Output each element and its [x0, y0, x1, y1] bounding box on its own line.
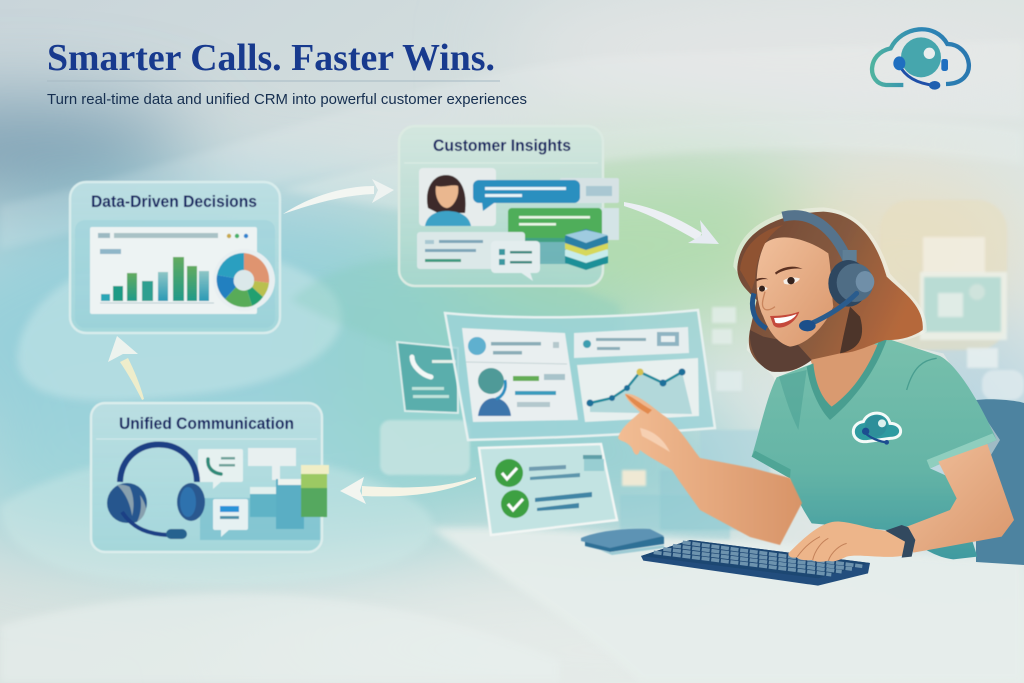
typing hand — [788, 522, 907, 562]
shirt — [752, 338, 997, 559]
chair — [976, 399, 1024, 565]
panel: customer insights — [399, 126, 619, 286]
customer photo card — [419, 168, 496, 226]
arrow: tasks to unified — [340, 477, 476, 504]
desk surface — [430, 528, 1024, 683]
headset — [752, 215, 874, 331]
subtitle: Turn real-time data and unified CRM into powerful customer experiences — [47, 91, 527, 108]
hair — [737, 212, 923, 372]
right arm — [905, 444, 1014, 553]
icon: headset — [107, 444, 205, 539]
donut chart — [213, 249, 275, 311]
title: Smarter Calls. Faster Wins. — [47, 37, 495, 79]
wristwatch — [885, 525, 915, 558]
arrow: unified to decisions — [108, 336, 144, 400]
contact card — [574, 327, 689, 358]
customer record card — [417, 232, 525, 269]
shirt logo — [853, 413, 901, 445]
panel: phone card — [397, 342, 458, 413]
keyboard — [641, 540, 870, 586]
panel: task checklist — [479, 444, 617, 535]
heading: data-driven decisions: Data-Driven Decisions — [91, 193, 257, 211]
pixel blocks — [200, 448, 329, 540]
check item two — [501, 490, 592, 518]
list bubble — [491, 241, 540, 281]
dashboard window — [90, 227, 275, 314]
panel: data-driven decisions — [70, 182, 280, 333]
panel: unified communication — [91, 403, 329, 552]
logo — [872, 29, 969, 90]
phone on desk — [581, 529, 664, 555]
arrow: insights to agent — [624, 202, 719, 244]
line chart card — [577, 358, 699, 422]
database stack — [565, 229, 608, 270]
heading: unified communication: Unified Communication — [119, 415, 294, 433]
halo outline — [733, 207, 1000, 457]
neck — [800, 303, 880, 410]
customer message bubbles — [473, 178, 619, 264]
agent figure — [641, 207, 1014, 586]
panel: agent dashboard — [445, 310, 715, 440]
heading: customer insights: Customer Insights — [433, 137, 571, 155]
pointing arm and hand — [618, 394, 802, 545]
arrow: decisions to insights — [283, 179, 394, 214]
chat bubble: phone — [198, 449, 243, 489]
bar chart — [100, 257, 214, 303]
chat bubble: message — [213, 499, 248, 537]
face — [756, 237, 833, 347]
agent profile card — [462, 328, 578, 422]
faded office background blocks — [380, 200, 1024, 540]
shirt collar — [807, 338, 887, 420]
check item one — [495, 459, 580, 487]
